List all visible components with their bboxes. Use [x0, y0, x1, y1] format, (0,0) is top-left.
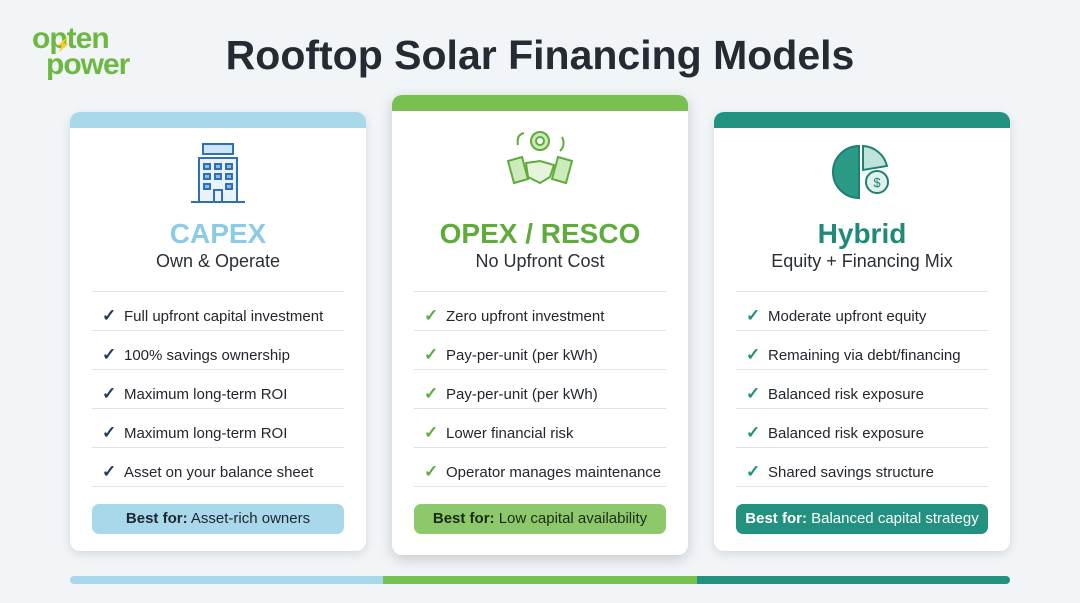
icon: pie coins	[832, 145, 889, 199]
list: Zero upfront investment	[446, 308, 604, 325]
panel: OPEX	[392, 95, 688, 555]
list: Moderate upfront equity	[768, 308, 926, 325]
list: Asset on your balance sheet	[124, 464, 313, 481]
list: Operator manages maintenance	[446, 464, 661, 481]
list: ✓	[746, 345, 760, 364]
list: ✓	[102, 462, 116, 481]
list: ✓	[424, 423, 438, 442]
list: Balanced risk exposure	[768, 386, 924, 403]
panel: Hybrid	[714, 112, 1010, 551]
logo: ⚡	[55, 37, 70, 52]
list: Maximum long-term ROI	[124, 425, 287, 442]
list: ✓	[102, 384, 116, 403]
heading: Hybrid	[818, 218, 906, 249]
list: ✓	[746, 384, 760, 403]
list: 100% savings ownership	[124, 347, 290, 364]
heading: OPEX / RESCO	[440, 218, 640, 249]
list: Remaining via debt/financing	[768, 347, 961, 364]
list: Shared savings structure	[768, 464, 934, 481]
logo	[32, 22, 130, 81]
list: Maximum long-term ROI	[124, 386, 287, 403]
pill	[414, 504, 666, 534]
list: ✓	[424, 462, 438, 481]
list: ✓	[102, 345, 116, 364]
list: Full upfront capital investment	[124, 308, 323, 325]
pill: Best for: Low capital availability	[433, 510, 647, 527]
icon: handshake	[506, 131, 574, 184]
list: ✓	[424, 306, 438, 325]
pill: Best for: Asset-rich owners	[126, 510, 310, 527]
list	[92, 291, 344, 487]
logo: opten	[32, 22, 109, 55]
list: ✓	[102, 423, 116, 442]
list: Pay-per-unit (per kWh)	[446, 347, 598, 364]
panel: CAPEX: Own & Operate	[156, 251, 280, 271]
list: Balanced risk exposure	[768, 425, 924, 442]
pill: Best for: Balanced capital strategy	[745, 510, 979, 527]
pill	[736, 504, 988, 534]
list: Pay-per-unit (per kWh)	[446, 386, 598, 403]
list: ✓	[102, 306, 116, 325]
list: ✓	[424, 345, 438, 364]
title: Rooftop Solar Financing Models	[226, 32, 854, 78]
list	[736, 291, 988, 487]
panel: Hybrid: Equity + Financing Mix	[771, 251, 953, 271]
list: ✓	[746, 462, 760, 481]
panel: OPEX: No Upfront Cost	[475, 251, 605, 271]
list: Lower financial risk	[446, 425, 574, 442]
list: ✓	[746, 423, 760, 442]
pill	[92, 504, 344, 534]
panel: CAPEX	[70, 112, 366, 551]
list	[414, 291, 666, 487]
list: ✓	[424, 384, 438, 403]
icon: building	[191, 143, 245, 203]
list: ✓	[746, 306, 760, 325]
heading: CAPEX	[170, 218, 266, 249]
icon: pie coins: $	[873, 175, 881, 190]
logo: power	[46, 48, 129, 81]
bottom bar	[70, 576, 1010, 584]
